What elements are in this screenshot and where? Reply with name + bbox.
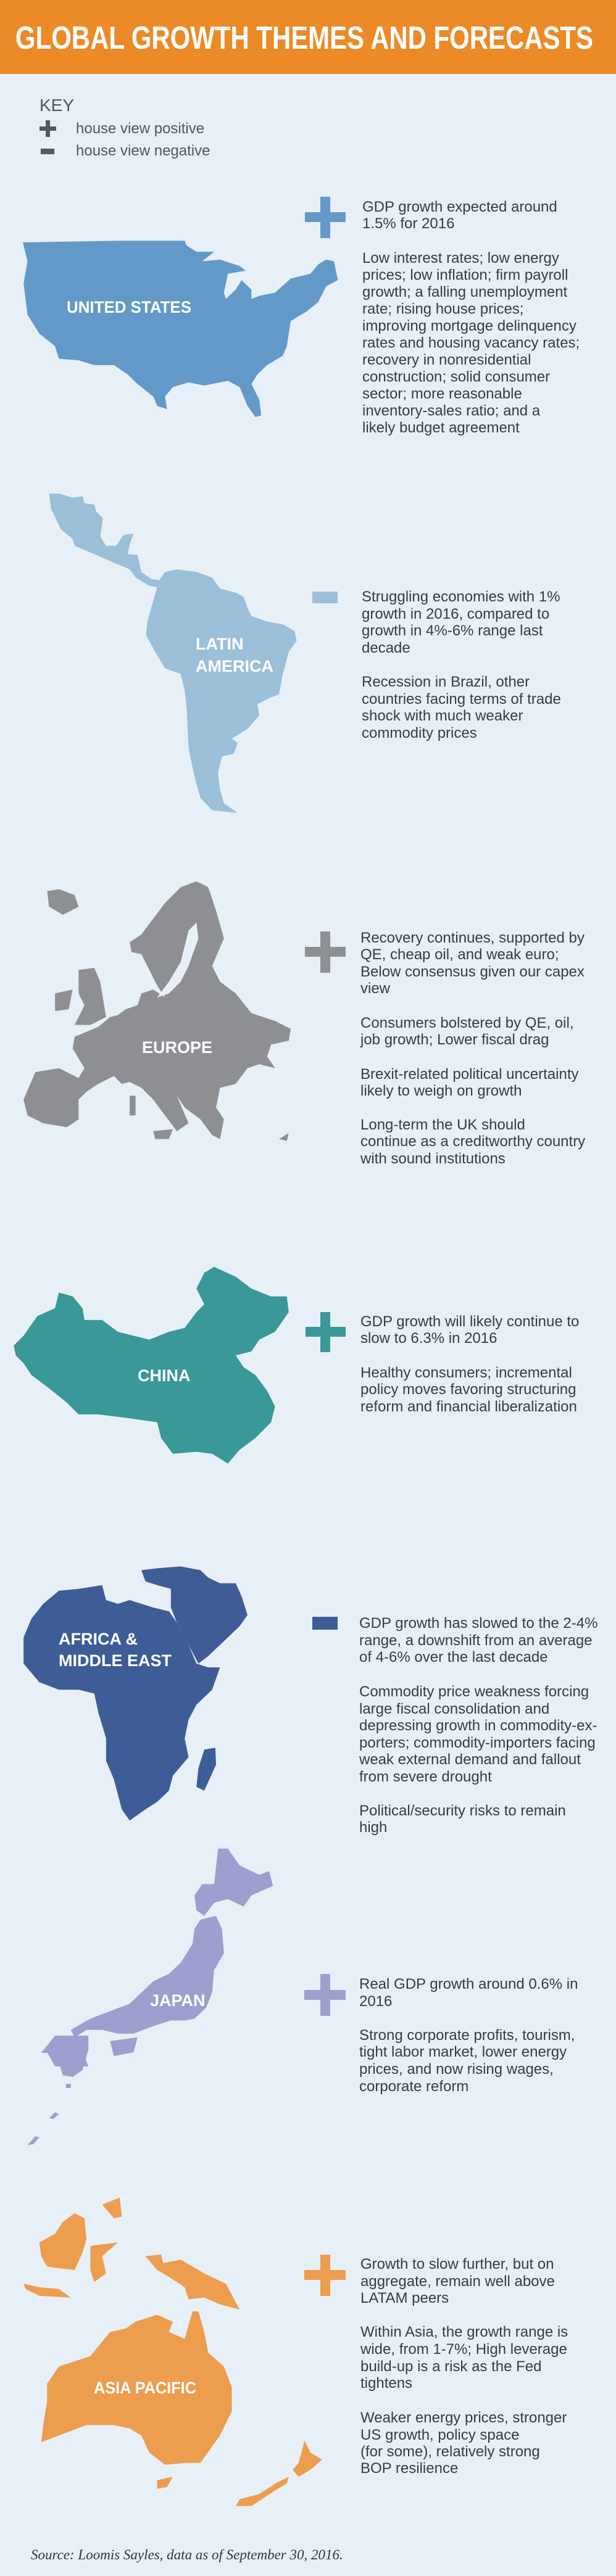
text block: africa and middle east: high — [359, 1819, 387, 1836]
text block: europe: Consumers bolstered by QE, oil, — [360, 1015, 573, 1031]
panel: africa and middle east — [23, 1566, 597, 1836]
text block: asia pacific: US growth, policy space — [360, 2427, 519, 2443]
text block: asia pacific: aggregate, remain well above — [360, 2273, 555, 2290]
text block: china: reform and financial liberalization — [360, 1398, 577, 1415]
text block: united states: recovery in nonresidential — [362, 352, 531, 368]
panel: latin america — [49, 493, 561, 813]
text block: europe: QE, cheap oil, and weak euro; — [360, 946, 559, 963]
text block: asia pacific: Growth to slow further, but on — [360, 2256, 554, 2273]
text block: asia pacific: build-up is a risk as the Fed — [360, 2358, 541, 2375]
text block: europe: view — [360, 980, 391, 997]
text block: japan: 2016 — [359, 1993, 392, 2010]
map: japan — [28, 1849, 273, 2145]
icon: square — [312, 1617, 338, 1630]
key legend: house view positive — [76, 120, 204, 137]
label: europe: EUROPE — [142, 1038, 212, 1057]
text block: japan: Real GDP growth around 0.6% in — [359, 1976, 578, 1992]
text block: asia pacific: Weaker energy prices, stronger — [360, 2409, 567, 2426]
text block: united states: rates and housing vacancy rates; — [362, 334, 580, 352]
label: africa and middle east: AFRICA & — [59, 1630, 138, 1648]
title banner — [0, 0, 616, 74]
text block: united states: growth; a falling unemployment — [362, 284, 568, 300]
text block: africa and middle east: large fiscal consolidation and — [359, 1701, 549, 1717]
text block: europe: Below consensus given our capex — [360, 964, 585, 980]
text block: japan — [359, 1976, 578, 2095]
text block: united states: rate; rising house prices; — [362, 301, 523, 317]
key legend: KEY — [40, 96, 74, 115]
text block: united states: sector; more reasonable — [362, 386, 522, 402]
icon: plus — [305, 197, 346, 238]
text block: latin america: commodity prices — [362, 725, 477, 741]
icon: plus — [304, 1974, 346, 2016]
text block: europe: likely to weigh on growth — [360, 1083, 522, 1099]
text block: africa and middle east: depressing growth in commodity-ex- — [359, 1717, 597, 1734]
text block: japan: tight labor market, lower energy — [359, 2044, 567, 2060]
text block: africa and middle east: Political/security risks to remain — [359, 1802, 566, 1819]
text block: united states: 1.5% for 2016 — [362, 215, 454, 232]
source note: Source: Loomis Sayles, data as of September 30, 2016. — [31, 2547, 343, 2562]
text block: china: Healthy consumers; incremental — [360, 1364, 572, 1381]
label: united states: UNITED STATES — [67, 298, 191, 316]
key legend — [40, 96, 210, 159]
map: latin america — [49, 493, 297, 813]
icon: plus — [306, 1312, 346, 1352]
text block: asia pacific: (for some), relatively strong — [360, 2443, 540, 2460]
map: china — [14, 1267, 289, 1464]
text block: latin america: shock with much weaker — [362, 708, 523, 724]
text block: africa and middle east: porters; commodity-importers facing — [359, 1735, 596, 1751]
text block: africa and middle east: range, a downshift from an average — [359, 1632, 593, 1649]
text block: united states: likely budget agreement — [362, 419, 520, 436]
text block: china: slow to 6.3% in 2016 — [360, 1330, 497, 1347]
map: united states — [23, 241, 338, 417]
text block: japan: prices, and now rising wages, — [359, 2061, 554, 2078]
text block: china: policy moves favoring structuring — [360, 1381, 576, 1398]
text block: latin america: growth in 2016, compared to — [362, 606, 549, 622]
text block: africa and middle east: GDP growth has slowed to the 2-4% — [359, 1615, 597, 1632]
panel: asia pacific — [23, 2198, 568, 2506]
text block: japan: corporate reform — [359, 2078, 468, 2095]
icon: plus — [304, 2255, 346, 2296]
text block: asia pacific: LATAM peers — [360, 2290, 449, 2306]
text block: latin america: decade — [362, 640, 410, 656]
label: africa and middle east: MIDDLE EAST — [59, 1651, 172, 1670]
text block: latin america: Recession in Brazil, other — [362, 674, 530, 690]
label: latin america: LATIN — [196, 635, 243, 653]
text block: africa and middle east: weak external demand and fallout — [359, 1751, 581, 1768]
text block: united states: Low interest rates; low energy — [362, 250, 559, 266]
text block: united states: construction; solid consumer — [362, 369, 550, 385]
label: china: CHINA — [138, 1366, 190, 1385]
text block: asia pacific: tightens — [360, 2375, 412, 2392]
text block: united states: prices; low inflation; firm payroll — [362, 266, 568, 284]
panel: united states — [23, 197, 580, 436]
label: asia pacific: ASIA PACIFIC — [94, 2379, 196, 2397]
text block: japan: Strong corporate profits, tourism, — [359, 2027, 575, 2044]
text block: asia pacific: wide, from 1-7%; High leverage — [360, 2341, 567, 2358]
panel: japan — [28, 1849, 578, 2145]
text block: europe: job growth; Lower fiscal drag — [360, 1031, 549, 1048]
icon: plus — [305, 931, 346, 973]
text block: europe: continue as a creditworthy country — [360, 1133, 585, 1150]
text block: china — [360, 1313, 579, 1415]
text block: latin america: countries facing terms of trade — [362, 691, 561, 708]
panel: europe — [23, 881, 585, 1167]
map: europe — [23, 881, 291, 1141]
text block: latin america — [362, 588, 561, 741]
text block: asia pacific: Within Asia, the growth range is — [360, 2324, 568, 2340]
text block: europe: with sound institutions — [360, 1150, 506, 1167]
text block: europe: Long-term the UK should — [360, 1117, 525, 1133]
text block: europe — [360, 930, 585, 1167]
text block: united states: inventory-sales ratio; and a — [362, 402, 541, 419]
text block: latin america: growth in 4%-6% range last — [362, 622, 543, 639]
text block: africa and middle east — [359, 1615, 597, 1836]
text block: asia pacific — [360, 2256, 568, 2477]
text block: united states: GDP growth expected around — [362, 199, 557, 215]
label: japan: JAPAN — [150, 1991, 206, 2010]
text block: europe: Recovery continues, supported by — [360, 930, 585, 946]
text block: africa and middle east: Commodity price weakness forcing — [359, 1683, 589, 1700]
map: asia pacific — [23, 2198, 322, 2506]
text block: africa and middle east: of 4-6% over the last decade — [359, 1649, 548, 1666]
icon: square — [312, 592, 338, 603]
text block: united states — [362, 199, 580, 436]
key legend: house view negative — [76, 142, 210, 159]
text block: europe: Brexit-related political uncertainty — [360, 1066, 579, 1083]
text block: africa and middle east: from severe drought — [359, 1769, 492, 1785]
map: africa and middle east — [23, 1566, 248, 1820]
label: latin america: AMERICA — [196, 657, 273, 675]
text block: asia pacific: BOP resilience — [360, 2460, 458, 2477]
panel: china — [14, 1267, 579, 1464]
text block: china: GDP growth will likely continue to — [360, 1313, 579, 1330]
text block: latin america: Struggling economies with 1% — [362, 588, 560, 605]
text block: united states: improving mortgage delinquency — [362, 318, 576, 334]
